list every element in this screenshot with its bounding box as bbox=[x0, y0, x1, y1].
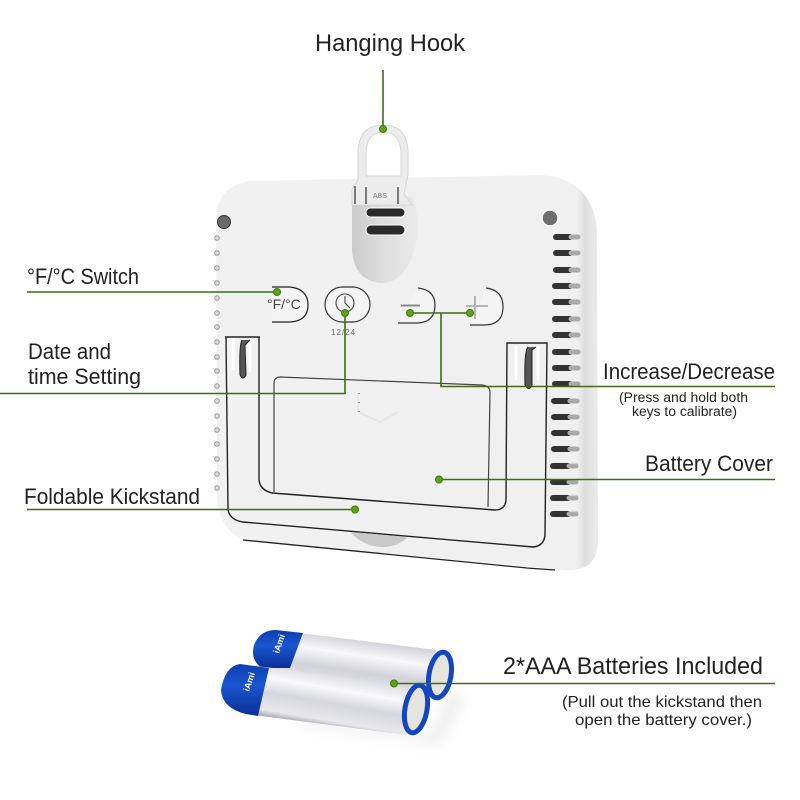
hanging hook bbox=[352, 125, 418, 283]
panel: thermometer back body bbox=[215, 125, 598, 570]
callout: AAA batteries: 2*AAA Batteries Included bbox=[503, 653, 763, 680]
callout: date and time setting: Date and bbox=[28, 339, 111, 364]
button: F/C switch bbox=[267, 287, 308, 322]
hanging hook: ABS bbox=[373, 193, 387, 200]
icon: screw hole right bbox=[542, 210, 558, 226]
callout: hanging hook: Hanging Hook bbox=[315, 30, 466, 57]
button: F/C switch: °F/°C bbox=[267, 296, 301, 312]
battery front: iAmi bbox=[241, 671, 257, 693]
callout: AAA batteries bbox=[390, 653, 775, 729]
button: minus bbox=[398, 288, 435, 323]
callout: date and time setting bbox=[0, 310, 348, 394]
callout: increase/decrease bbox=[406, 310, 775, 419]
callout: AAA batteries: open the battery cover.) bbox=[575, 712, 752, 729]
foldable kickstand outline bbox=[225, 337, 547, 547]
right vent slots bbox=[553, 237, 578, 514]
battery back: iAmi bbox=[271, 633, 287, 655]
callout: F/C switch: °F/°C Switch bbox=[27, 264, 139, 289]
callout: battery cover bbox=[436, 451, 775, 483]
button: clock bbox=[325, 287, 370, 337]
battery back bbox=[253, 630, 455, 703]
callout: foldable kickstand: Foldable Kickstand bbox=[24, 484, 200, 509]
callout: hanging hook bbox=[315, 30, 466, 132]
callout: F/C switch bbox=[27, 264, 280, 296]
left vent holes bbox=[215, 236, 219, 490]
batteries bbox=[221, 630, 465, 745]
button: clock: 12/24 bbox=[331, 328, 356, 337]
callout: date and time setting: time Setting bbox=[28, 364, 141, 389]
callout: increase/decrease: (Press and hold both bbox=[619, 390, 748, 405]
battery front bbox=[221, 664, 431, 735]
callout: increase/decrease: keys to calibrate) bbox=[632, 404, 737, 419]
callout: battery cover: Battery Cover bbox=[645, 451, 773, 476]
callout: foldable kickstand bbox=[24, 484, 358, 513]
button: plus bbox=[466, 288, 503, 325]
icon: screw hole left bbox=[218, 216, 230, 228]
callout: increase/decrease: Increase/Decrease bbox=[603, 359, 775, 384]
battery cover outline bbox=[274, 377, 490, 507]
battery shadow bbox=[300, 690, 465, 745]
callout: AAA batteries: (Pull out the kickstand then bbox=[562, 694, 762, 711]
